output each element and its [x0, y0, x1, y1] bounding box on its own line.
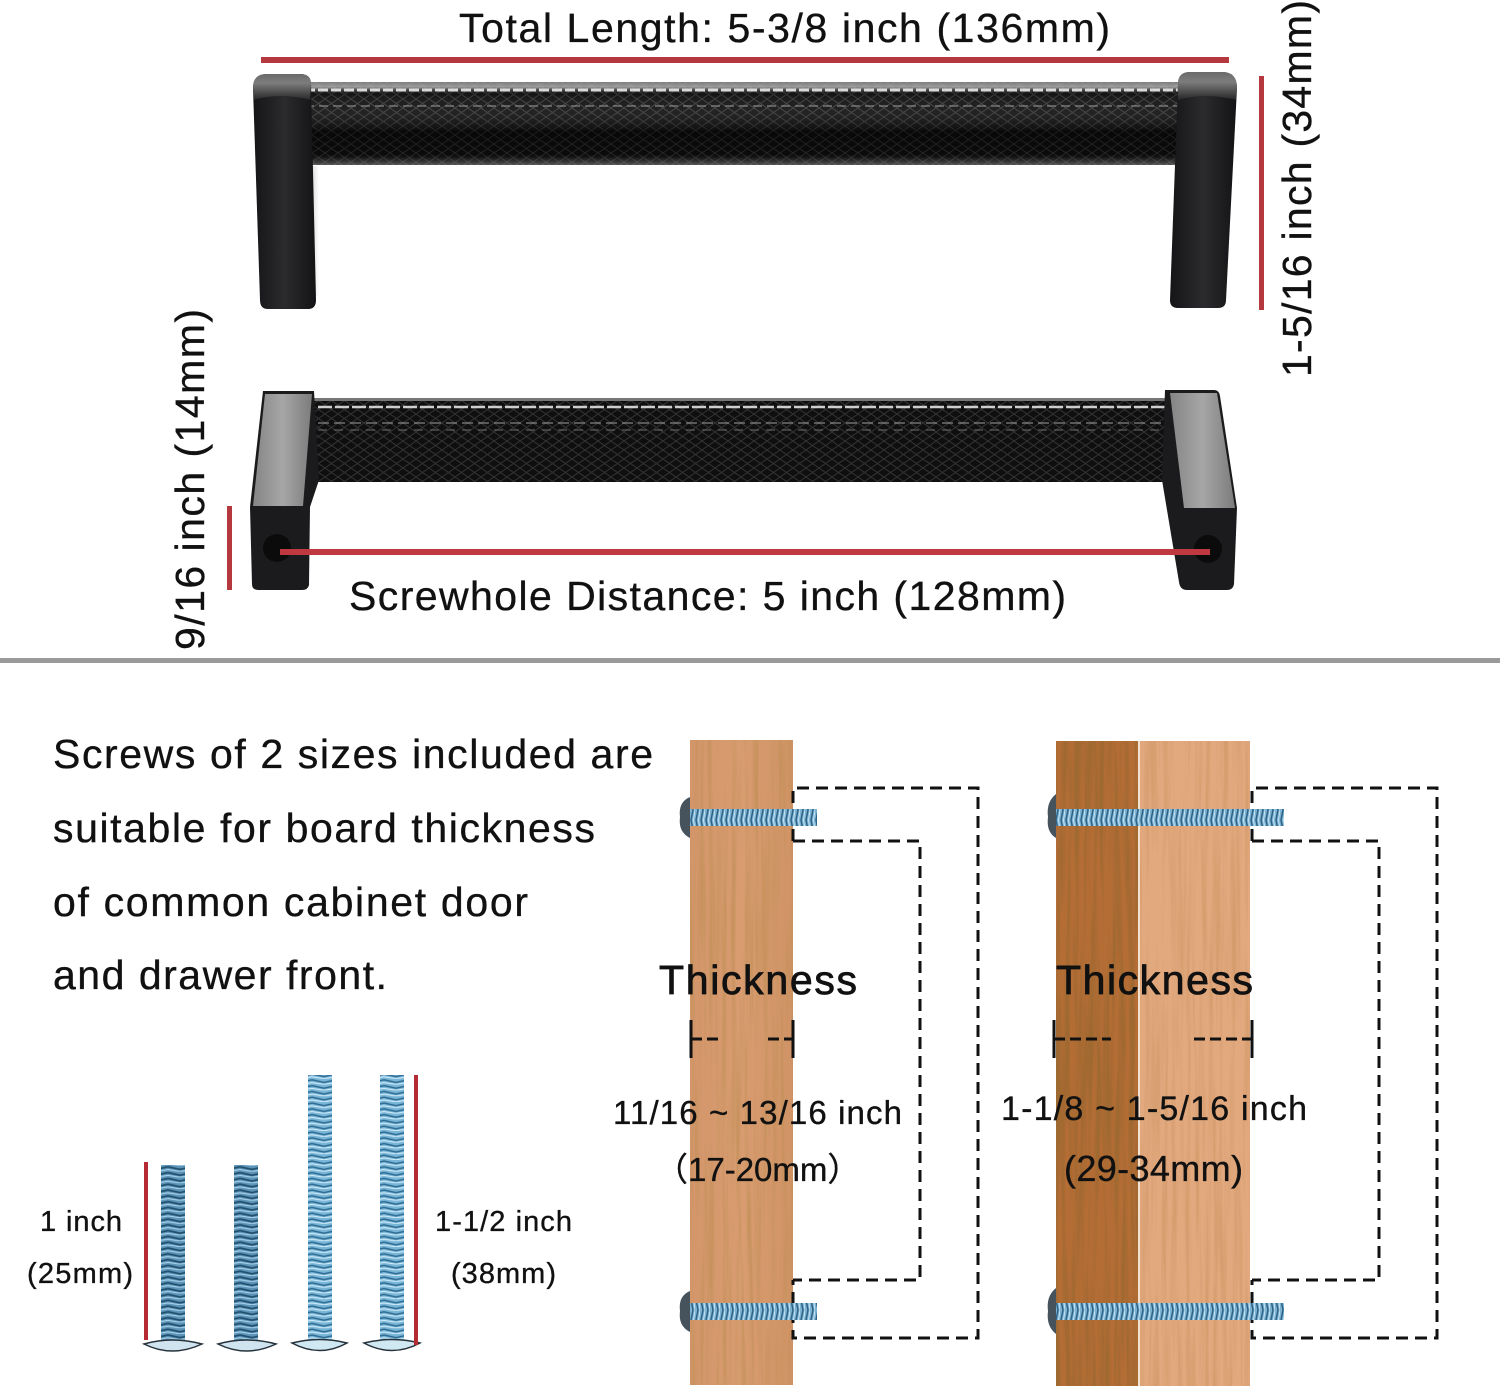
heading: thickness: Thickness	[659, 957, 857, 1003]
screw: top	[1048, 794, 1284, 838]
left leg sliver shadow	[311, 166, 319, 296]
heading: thickness: Thickness	[1056, 957, 1253, 1003]
measure line: total length	[261, 57, 1229, 63]
divider	[0, 658, 1500, 663]
dashed handle outline: long screw	[1252, 788, 1437, 1338]
label: height: 1-5/16 inch (34mm)	[1274, 0, 1320, 377]
handle: side view	[253, 72, 1237, 309]
label: short screw: (25mm)	[27, 1258, 133, 1290]
screws: two sizes	[144, 1075, 420, 1351]
label: thickness range: (29-34mm)	[1064, 1148, 1243, 1189]
label: thickness range: 1-1/8 ~ 1-5/16 inch	[1001, 1090, 1307, 1128]
right end block	[1162, 390, 1237, 590]
wood boards	[1056, 741, 1250, 1386]
measure line: long screw	[414, 1075, 418, 1345]
label: long screw: 1-1/2 inch	[435, 1206, 572, 1238]
label: short screw: 1 inch	[40, 1206, 122, 1238]
short screw 2	[218, 1165, 276, 1351]
description text	[53, 731, 653, 998]
measure line: height	[1259, 76, 1264, 310]
thin board diagram	[613, 740, 978, 1385]
screw: top	[680, 797, 817, 838]
description text: Screws of 2 sizes included are	[53, 731, 653, 777]
right leg	[1170, 72, 1237, 308]
measure line: screwhole distance	[280, 549, 1210, 555]
short screw 1	[144, 1165, 202, 1351]
left leg	[253, 74, 316, 309]
knurled bar: front view	[312, 398, 1172, 482]
label: width: 9/16 inch (14mm)	[167, 309, 213, 650]
long screw 1	[292, 1075, 347, 1350]
label: total length: Total Length: 5-3/8 inch (136mm)	[459, 5, 1110, 51]
label: screwhole distance: Screwhole Distance: 5 inch (128mm)	[349, 573, 1066, 619]
label: short screw	[27, 1206, 133, 1290]
screw: bottom	[1048, 1288, 1284, 1334]
label: long screw: (38mm)	[451, 1258, 556, 1290]
description text: of common cabinet door	[53, 879, 528, 925]
handle: front view	[250, 390, 1237, 590]
measure line: short screw	[144, 1162, 148, 1340]
wood board	[690, 740, 793, 1385]
label: thickness range: （17-20mm）	[655, 1151, 860, 1188]
label: thickness range	[1001, 1090, 1307, 1189]
measure line: width	[227, 506, 232, 590]
label: thickness range: 11/16 ~ 13/16 inch	[613, 1094, 902, 1131]
knurled bar: side view	[300, 82, 1185, 165]
thickness bracket	[1054, 1020, 1252, 1058]
dashed handle outline: short screw	[793, 841, 920, 1280]
description text: suitable for board thickness	[53, 805, 595, 851]
screw: bottom	[680, 1291, 817, 1332]
label: thickness range	[613, 1094, 902, 1188]
dashed handle outline: short screw	[1252, 841, 1379, 1280]
thick board diagram	[1001, 741, 1437, 1386]
long screw 2	[364, 1075, 420, 1350]
thickness bracket	[691, 1020, 793, 1058]
left end block	[250, 391, 319, 590]
dashed handle outline: long screw	[793, 788, 978, 1338]
label: long screw	[435, 1206, 572, 1290]
description text: and drawer front.	[53, 952, 387, 998]
